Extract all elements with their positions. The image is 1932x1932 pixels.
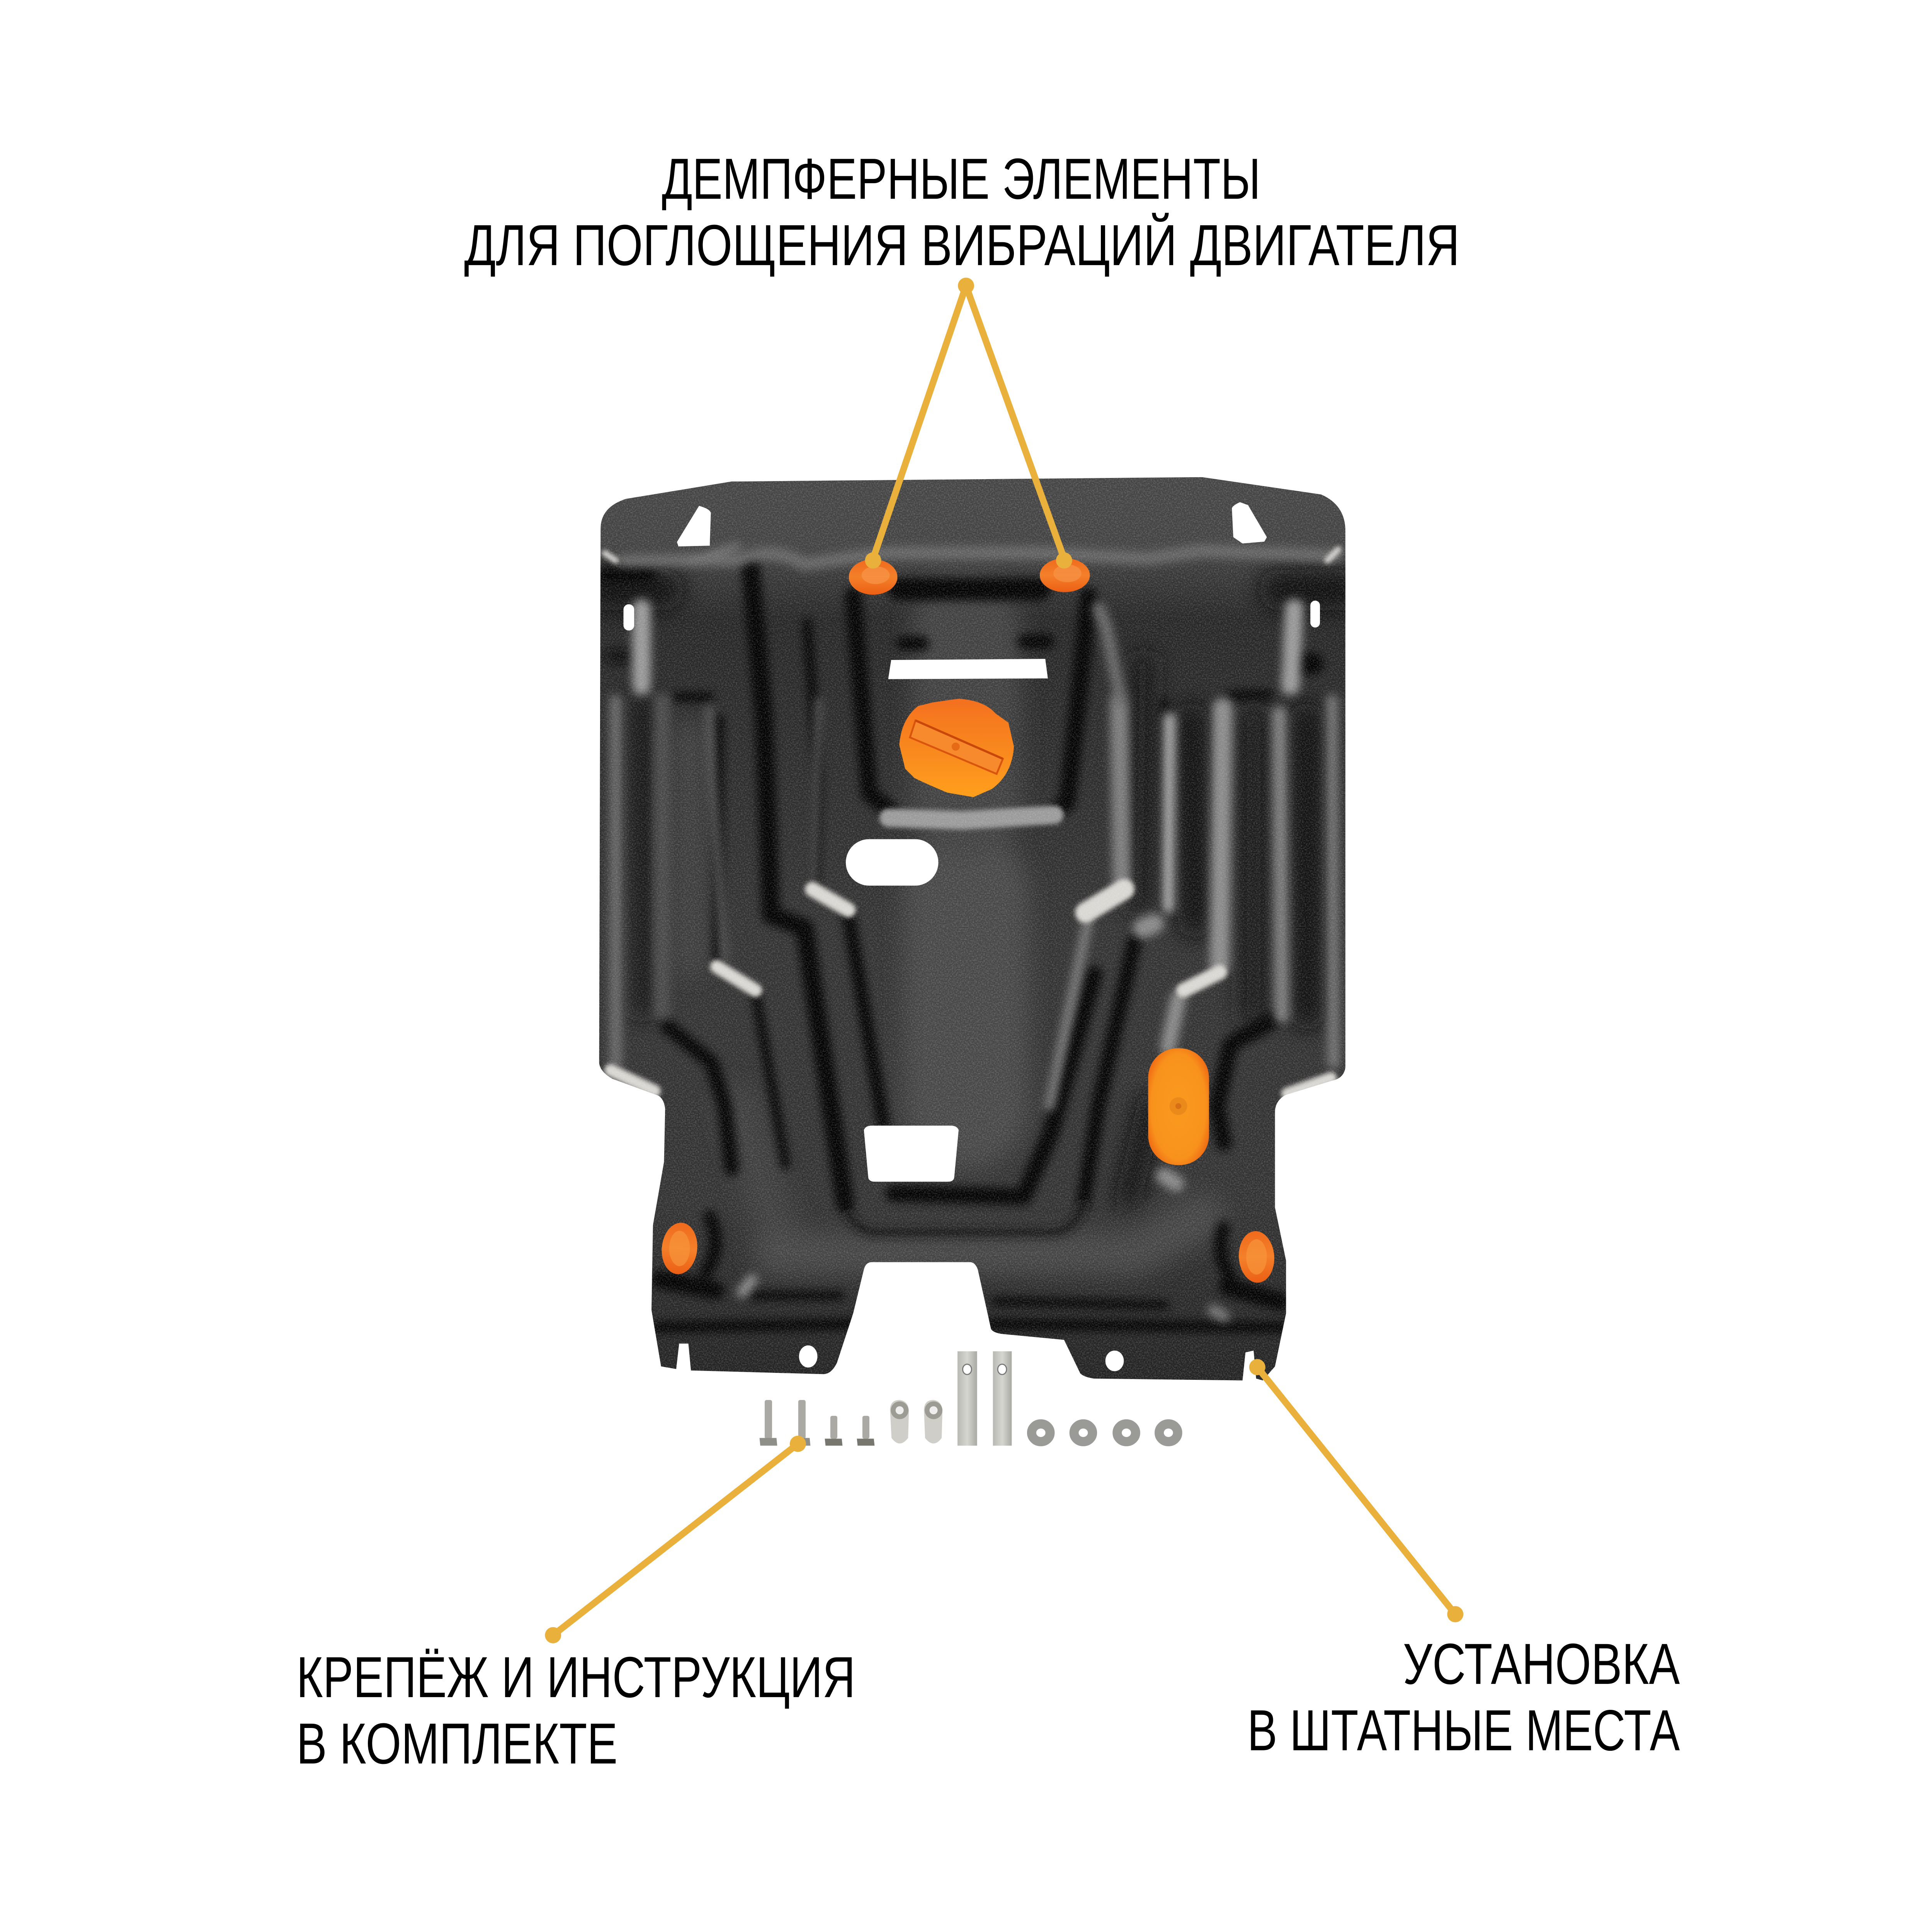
orange damper: large round plug <box>899 699 1014 797</box>
caption: fasteners and instructions <box>296 1645 855 1776</box>
short bolt 2 <box>857 1416 874 1446</box>
orange damper: oval plug <box>1148 1048 1209 1165</box>
orange damper: bottom left <box>659 1221 700 1276</box>
heading: damper elements: ДЕМПФЕРНЫЕ ЭЛЕМЕНТЫ <box>662 146 1260 211</box>
long bolt 1 <box>760 1400 777 1446</box>
leader line: mounting <box>1249 1359 1463 1622</box>
nut plate 1 <box>890 1400 909 1444</box>
caption: fasteners and instructions: В КОМПЛЕКТЕ <box>296 1711 617 1776</box>
dark creases <box>605 564 1313 1327</box>
long bolt 2 <box>793 1400 810 1446</box>
mounting holes <box>624 502 1320 1371</box>
plate body <box>590 472 1357 1386</box>
light ridges <box>616 546 1337 1316</box>
soft shading <box>605 590 1342 1253</box>
caption: mounting points: В ШТАТНЫЕ МЕСТА <box>1247 1698 1680 1763</box>
caption: mounting points: УСТАНОВКА <box>1403 1631 1680 1696</box>
heading: damper elements <box>464 146 1460 277</box>
infographic canvas <box>300 158 1680 1764</box>
orange damper: bottom right <box>1237 1230 1276 1284</box>
bright highlights <box>605 549 1338 1094</box>
orange damper: top left <box>849 560 898 595</box>
short bolt 1 <box>825 1416 842 1446</box>
leader lines: dampers <box>865 278 1072 568</box>
engine skid plate <box>590 472 1357 1386</box>
caption: mounting points <box>1247 1631 1680 1763</box>
leader line: fasteners <box>545 1436 806 1643</box>
fastener kit <box>760 1351 1178 1446</box>
nut plate 2 <box>924 1400 942 1444</box>
orange damper: top right <box>1040 558 1090 592</box>
long strip 1 <box>957 1351 977 1446</box>
caption: fasteners and instructions: КРЕПЁЖ И ИНСТРУКЦИЯ <box>296 1645 855 1709</box>
washers <box>1032 1424 1178 1442</box>
heading: damper elements: ДЛЯ ПОГЛОЩЕНИЯ ВИБРАЦИЙ ДВИГАТЕЛЯ <box>464 213 1460 277</box>
long strip 2 <box>993 1351 1012 1446</box>
